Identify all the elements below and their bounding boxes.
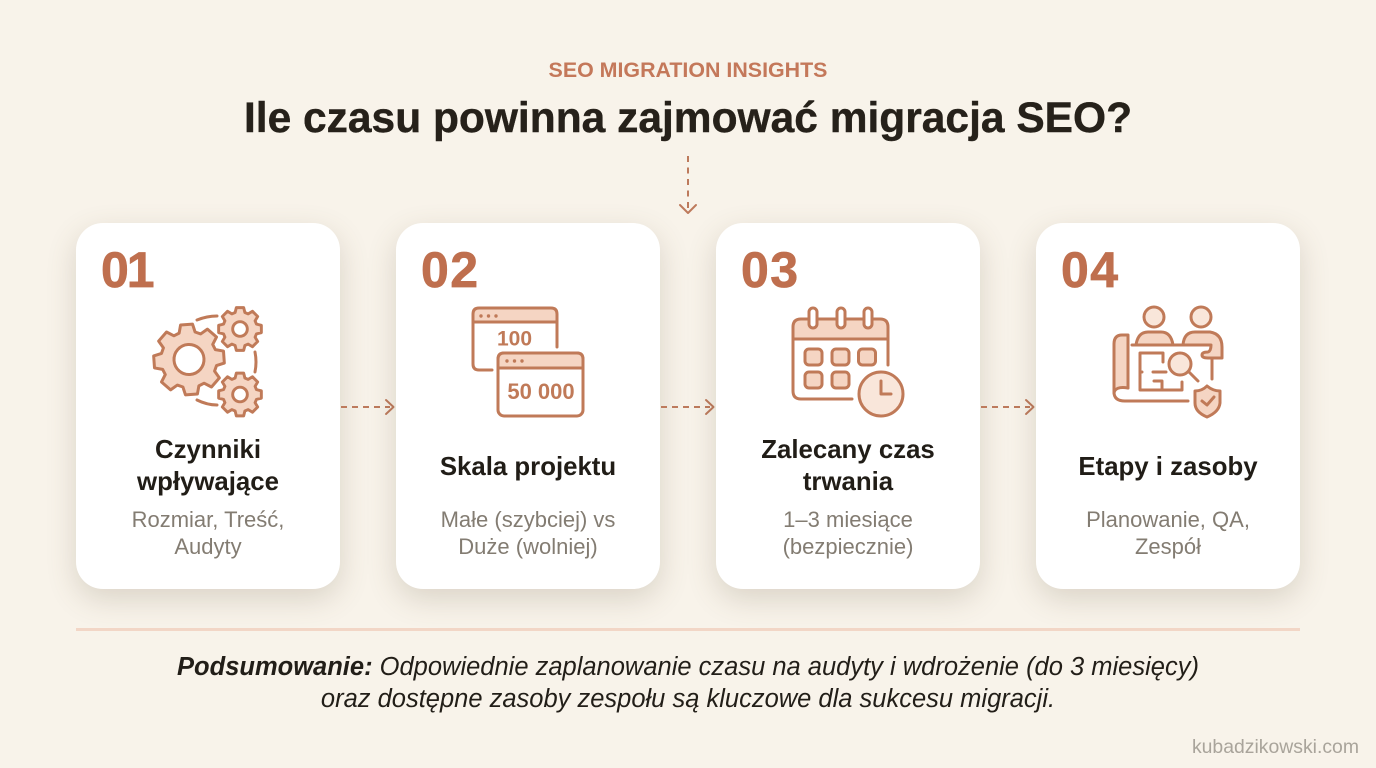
icon: two browser windows — [472, 306, 584, 418]
card description: Planowanie, QA, — [1086, 507, 1250, 532]
icon: two browser windows: 50 000 — [507, 379, 575, 404]
arrow: card 2 to 3 — [661, 399, 714, 415]
eyebrow heading: SEO MIGRATION INSIGHTS — [549, 58, 827, 82]
card heading: Skala projektu — [440, 453, 616, 481]
step number 04: 04 — [1061, 242, 1120, 298]
card description: Zespół — [1135, 534, 1201, 559]
website credit: kubadzikowski.com — [1192, 736, 1359, 758]
summary text: Podsumowanie: Odpowiednie zaplanowanie czasu na audyty i wdrożenie (do 3 miesięcy) — [177, 653, 1199, 681]
card description — [441, 507, 615, 559]
title: Ile czasu powinna zajmować migracja SEO? — [244, 95, 1132, 142]
card description — [132, 507, 284, 559]
divider — [76, 628, 1300, 631]
panel: card 03 — [716, 223, 980, 589]
step number 01: 01 — [101, 242, 153, 298]
card heading: trwania — [803, 468, 893, 496]
card description: 1–3 miesiące — [783, 507, 913, 532]
card heading: Czynniki — [155, 436, 261, 464]
card heading — [136, 436, 279, 496]
arrow: title to cards — [679, 156, 697, 214]
card description: (bezpiecznie) — [783, 534, 913, 559]
panel: card 01 — [76, 223, 340, 589]
icon: two browser windows: 100 — [497, 328, 532, 350]
icon: team reviewing plan — [1112, 306, 1224, 418]
icon: gears — [152, 306, 263, 418]
card heading: Zalecany czas — [761, 436, 935, 464]
step number 03: 03 — [741, 242, 800, 298]
card description: Duże (wolniej) — [458, 534, 598, 559]
panel: card 04 — [1036, 223, 1300, 589]
card description: Audyty — [174, 534, 242, 559]
step number 02: 02 — [421, 242, 480, 298]
card description: Małe (szybciej) vs — [441, 507, 615, 532]
card heading — [761, 436, 935, 496]
card heading: Etapy i zasoby — [1078, 453, 1258, 481]
card description — [1086, 507, 1250, 559]
summary text: oraz dostępne zasoby zespołu są kluczowe dla sukcesu migracji. — [321, 685, 1055, 713]
card description — [783, 507, 913, 559]
icon: calendar with clock — [792, 306, 904, 418]
arrow: card 1 to 2 — [341, 399, 394, 415]
card description: Rozmiar, Treść, — [132, 507, 284, 532]
card heading: wpływające — [137, 468, 279, 496]
panel: card 02 — [396, 223, 660, 589]
arrow: card 3 to 4 — [981, 399, 1034, 415]
summary text — [177, 653, 1199, 713]
